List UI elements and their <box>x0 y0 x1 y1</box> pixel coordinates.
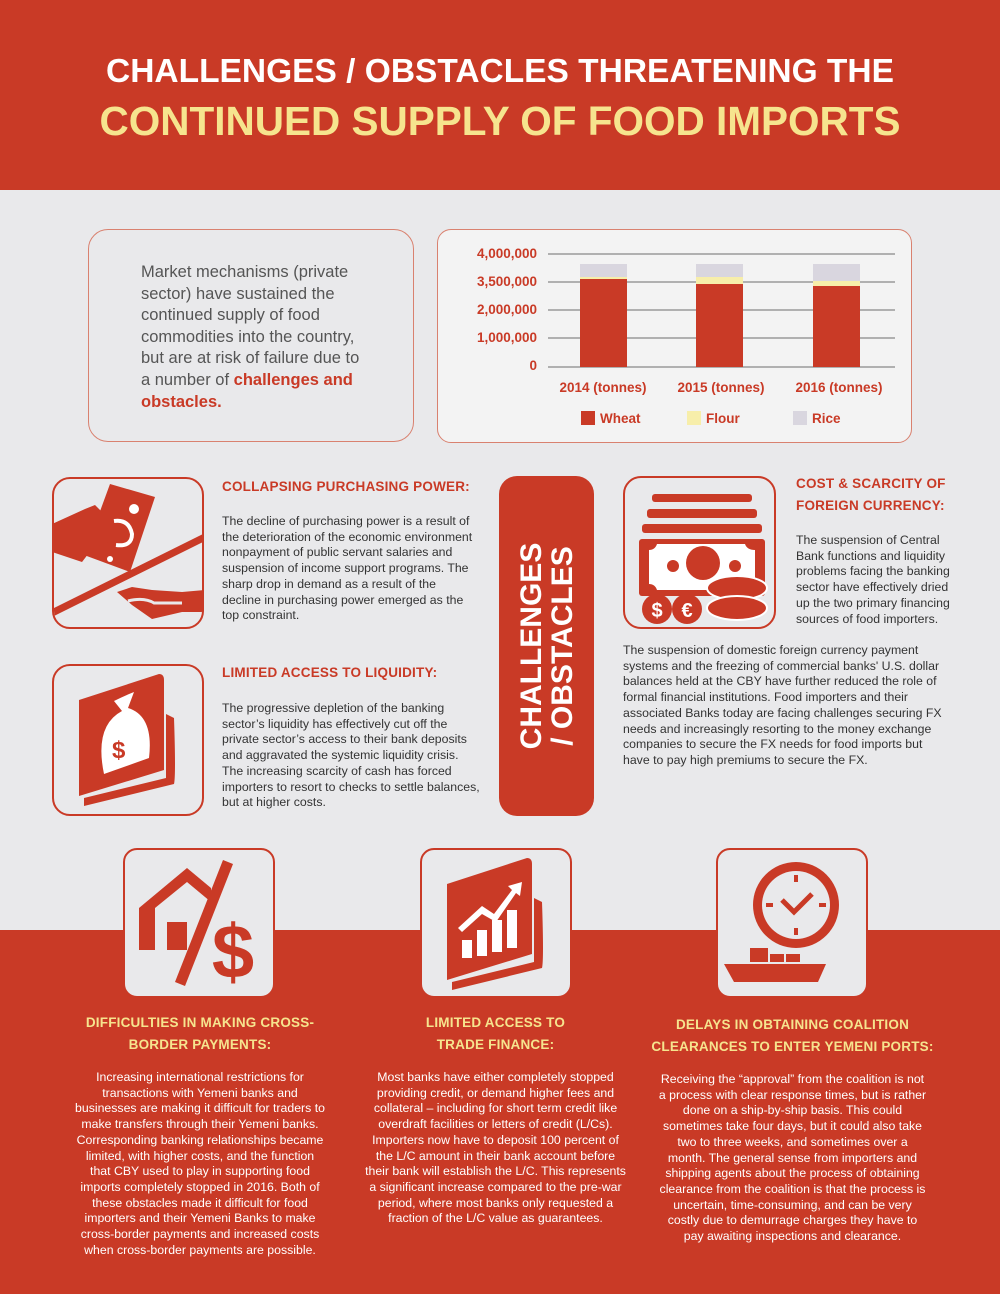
icon: liquidity <box>52 664 204 816</box>
icon: purchasing power <box>52 477 204 629</box>
bar chart <box>437 229 912 443</box>
intro text box <box>88 229 414 442</box>
text: liquidity: The progressive depletion of the banking sector’s liquidity has effectively cut off the private sector’s access to their bank deposits and aggravated the systemic liquidity crisis. The increasing scarcity of cash has forced importers to resort to checks to settle balances, but at higher costs. <box>222 701 480 809</box>
panel: cross-border text: DIFFICULTIES IN MAKING CROSS- <box>86 1015 314 1030</box>
title <box>99 53 901 144</box>
heading: foreign currency <box>796 476 946 513</box>
panel: delays text: CLEARANCES TO ENTER YEMENI PORTS: <box>651 1039 934 1054</box>
icon: foreign currency: $ <box>651 600 663 622</box>
panel: trade finance text: Most banks have either completely stopped providing credit, or demand higher fees and collateral – including for short term credit like overdraft facilities or letters of credit (L/Cs). Importers now have to deposit 100 percent of the L/C amount in their bank account before their bank will establish the L/C. This represents a significant increase compared to the pre-war period, where most banks only requested a fraction of the L/C value as guarantees. <box>365 1070 626 1225</box>
central label: challenges / obstacles: / OBSTACLES <box>546 546 578 746</box>
bar chart: 2016 (tonnes) <box>795 380 883 395</box>
panel: trade finance text: LIMITED ACCESS TO <box>426 1015 565 1030</box>
panel: cross-border text: Increasing international restrictions for transactions with Yemeni banks and businesses are making it difficult for traders to make transfers through their Yemeni banks. Corresponding banking relationships became limited, with higher costs, and the function that CBY used to play in supporting food imports completely stopped in 2016. Both of these obstacles made it difficult for food importers and their Yemeni Banks to make cross-border payments and increased costs when cross-border payments are possible. <box>75 1070 325 1257</box>
icon: trade finance <box>420 848 572 998</box>
icon: cross-border <box>123 848 275 998</box>
heading: purchasing power: COLLAPSING PURCHASING POWER: <box>222 479 470 494</box>
panel: cross-border text: BORDER PAYMENTS: <box>129 1037 271 1052</box>
panel: delays text: DELAYS IN OBTAINING COALITION <box>676 1017 909 1032</box>
bar chart: 3,500,000 <box>477 274 537 289</box>
title: CHALLENGES / OBSTACLES THREATENING THE <box>106 53 894 90</box>
text: purchasing power: The decline of purchasing power is a result of the deterioration of the economic environment nonpayment of public servant salaries and suspension of income support programs. The sharp drop in demand as a result of the decline in purchasing power emerged as the top constraint. <box>222 514 472 622</box>
icon: foreign currency <box>623 476 776 629</box>
bar chart: Wheat <box>600 411 641 426</box>
header band <box>0 0 1000 190</box>
text: foreign currency continued: The suspension of domestic foreign currency payment systems and the freezing of commercial banks' U.S. dollar balances held at the CBY have further reduced the role of formal financial institutions. Food importers and their associated Banks today are facing challenges securing FX needs and increasingly resorting to the money exchange companies to secure the FX needs for food imports but have to pay high premiums to secure the FX. <box>623 643 942 767</box>
bottom band <box>0 930 1000 1294</box>
icon: delays / ship & clock <box>716 848 868 998</box>
central label: challenges / obstacles: CHALLENGES <box>514 543 548 749</box>
panel: trade finance text: TRADE FINANCE: <box>437 1037 554 1052</box>
heading: liquidity: LIMITED ACCESS TO LIQUIDITY: <box>222 665 437 680</box>
bar chart: 1,000,000 <box>477 330 537 345</box>
bar chart: 0 <box>529 358 537 373</box>
heading: foreign currency: FOREIGN CURRENCY: <box>796 498 945 513</box>
text: foreign currency: The suspension of Central Bank functions and liquidity problems facing the banking sector have effectively dried up the two primary financing sources of food importers. <box>796 533 950 626</box>
icon: liquidity: $ <box>112 737 126 764</box>
bar chart: Flour <box>706 411 740 426</box>
bar chart: 2,000,000 <box>477 302 537 317</box>
bar chart: 2014 (tonnes) <box>559 380 647 395</box>
bar chart: 4,000,000 <box>477 246 537 261</box>
panel: delays text: Receiving the “approval” from the coalition is not a process with clear response times, but is rather done on a ship-by-ship basis. This could sometimes take four days, but it could also take two to three weeks, and sometimes over a month. The general sense from importers and shipping agents about the process of obtaining clearance from the coalition is that the process is uncertain, time-consuming, and can be very costly due to demurrage charges they have to pay awaiting inspections and clearance. <box>659 1072 926 1243</box>
bar chart: Rice <box>812 411 841 426</box>
bar chart: 2015 (tonnes) <box>677 380 765 395</box>
heading: foreign currency: COST & SCARCITY OF <box>796 476 946 491</box>
icon: foreign currency: € <box>681 600 693 622</box>
title: CONTINUED SUPPLY OF FOOD IMPORTS <box>99 98 901 144</box>
icon: cross-border: $ <box>212 910 254 995</box>
central label: challenges / obstacles <box>499 476 594 816</box>
intro text box: Market mechanisms (private sector) have sustained the continued supply of food commodities into the country, but are at risk of failure due to a number of challenges and obstacles. <box>141 263 359 411</box>
